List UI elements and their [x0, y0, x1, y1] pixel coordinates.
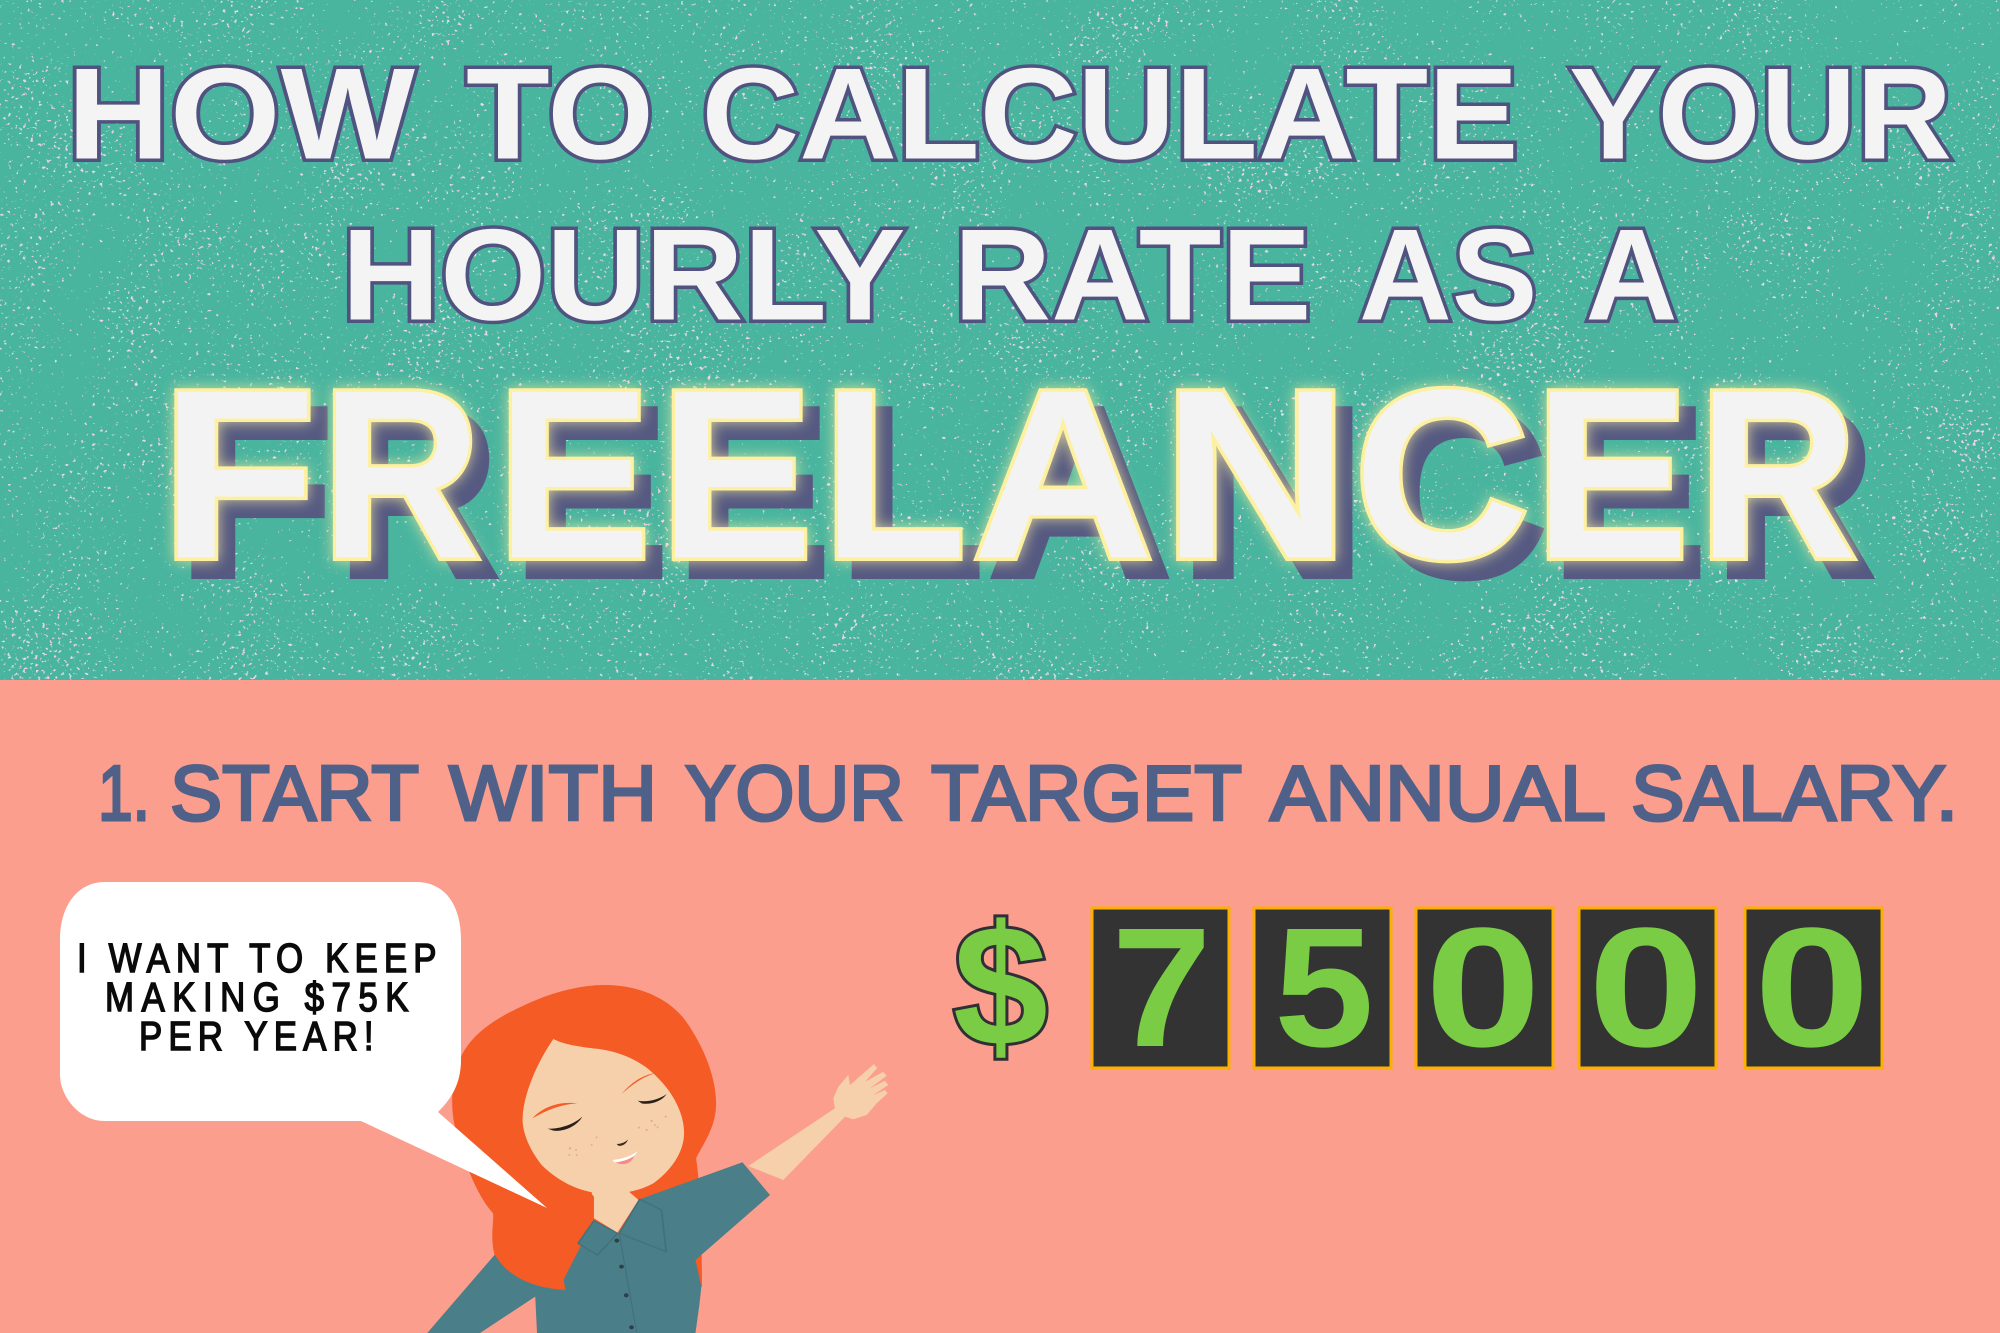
digit 7	[1092, 893, 1229, 1083]
panel: salmon salary section	[0, 680, 2000, 1333]
heading: step 1: SALARY.	[1631, 749, 1958, 837]
digit 0: 0	[1588, 893, 1704, 1083]
salary counter: $75000	[953, 890, 1882, 1083]
title line 1	[67, 40, 1952, 186]
title line 1: HOW	[67, 40, 415, 186]
title word: freelancer: E	[497, 340, 651, 610]
heading: step 1: TARGET	[931, 749, 1242, 837]
heading: step 1: WITH	[449, 749, 657, 837]
title line 1: TO	[466, 40, 654, 186]
speech bubble	[60, 882, 547, 1208]
title word: freelancer	[161, 340, 1857, 610]
title word: freelancer: C	[1354, 340, 1529, 610]
mouth	[612, 1151, 638, 1164]
title line 2: RATE	[954, 202, 1312, 348]
eyebrows	[532, 1073, 657, 1118]
title line 2: HOURLY	[342, 202, 906, 348]
title word: freelancer: L	[822, 340, 966, 610]
heading: step 1: ANNUAL	[1270, 749, 1606, 837]
panel: teal title header	[0, 0, 2000, 680]
nose	[617, 1139, 628, 1146]
title line 2	[342, 202, 1678, 348]
shirt	[427, 1162, 770, 1333]
shirt buttons	[614, 1239, 634, 1329]
title word: freelancer: N	[1163, 340, 1349, 610]
freckles	[568, 1116, 667, 1156]
dollar sign: $	[953, 890, 1048, 1082]
title word: freelancer: A	[972, 340, 1154, 610]
title: how to calculate your hourly rate as a freelancer	[67, 40, 1952, 610]
neck	[592, 1188, 639, 1233]
digit 0	[1416, 893, 1553, 1083]
title line 2: AS	[1359, 202, 1538, 348]
hair back	[452, 985, 716, 1290]
title line 2: A	[1586, 202, 1678, 348]
illustration: red-haired woman waving	[427, 985, 888, 1333]
title word: freelancer: E	[1535, 340, 1689, 610]
bubble text	[77, 936, 437, 1060]
digit 0: 0	[1754, 893, 1870, 1083]
digit 0	[1745, 893, 1882, 1083]
digit 0	[1579, 893, 1716, 1083]
bubble text: PER YEAR!	[139, 1014, 374, 1060]
title word: freelancer: E	[660, 340, 813, 610]
digit 5: 5	[1274, 893, 1374, 1083]
face	[523, 1039, 684, 1194]
heading: step 1: 1.	[98, 749, 150, 837]
body and hair	[427, 985, 770, 1333]
title word: freelancer: F	[161, 340, 316, 610]
heading: step 1: YOUR	[685, 749, 904, 837]
hair front lock	[494, 1188, 594, 1290]
shirt collar	[578, 1199, 666, 1255]
digit 5	[1254, 893, 1391, 1083]
title word: freelancer: R	[1698, 340, 1857, 610]
title word: freelancer: R	[321, 340, 481, 610]
raised arm and hand	[748, 1064, 888, 1180]
closed eyes	[548, 1094, 667, 1131]
digit 0: 0	[1425, 893, 1541, 1083]
heading: step 1: START	[170, 749, 419, 837]
bubble text: MAKING $75K	[105, 975, 408, 1021]
title line 1: YOUR	[1569, 40, 1952, 186]
bubble text: I WANT TO KEEP	[77, 936, 437, 982]
digit 7: 7	[1112, 893, 1212, 1083]
title line 1: CALCULATE	[702, 40, 1518, 186]
heading: step 1	[98, 749, 1958, 837]
